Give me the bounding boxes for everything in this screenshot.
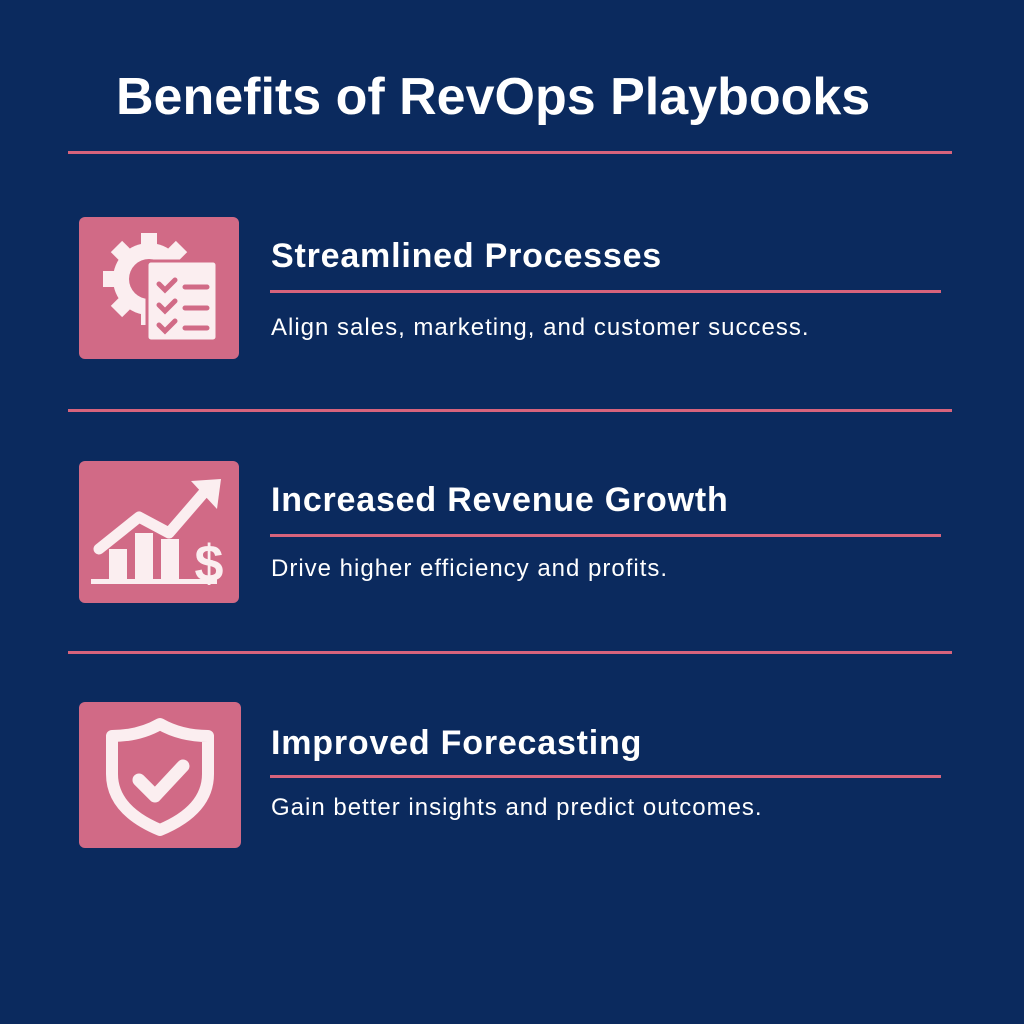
icon: growth chart with dollar [79,461,239,603]
panel: increased revenue growth [79,461,941,603]
title: Benefits of RevOps Playbooks [116,68,870,126]
heading: Increased Revenue Growth [271,481,729,519]
heading: Improved Forecasting [271,724,642,762]
icon: shield with check [79,702,241,848]
panel: streamlined processes [79,217,941,359]
icon: gear and checklist [79,217,239,359]
heading: Streamlined Processes [271,237,662,275]
icon: growth chart with dollar: $ [195,535,224,593]
description: Drive higher efficiency and profits. [271,555,668,582]
description: Gain better insights and predict outcomes. [271,794,763,821]
description: Align sales, marketing, and customer success. [271,314,810,341]
panel: improved forecasting [79,702,941,848]
